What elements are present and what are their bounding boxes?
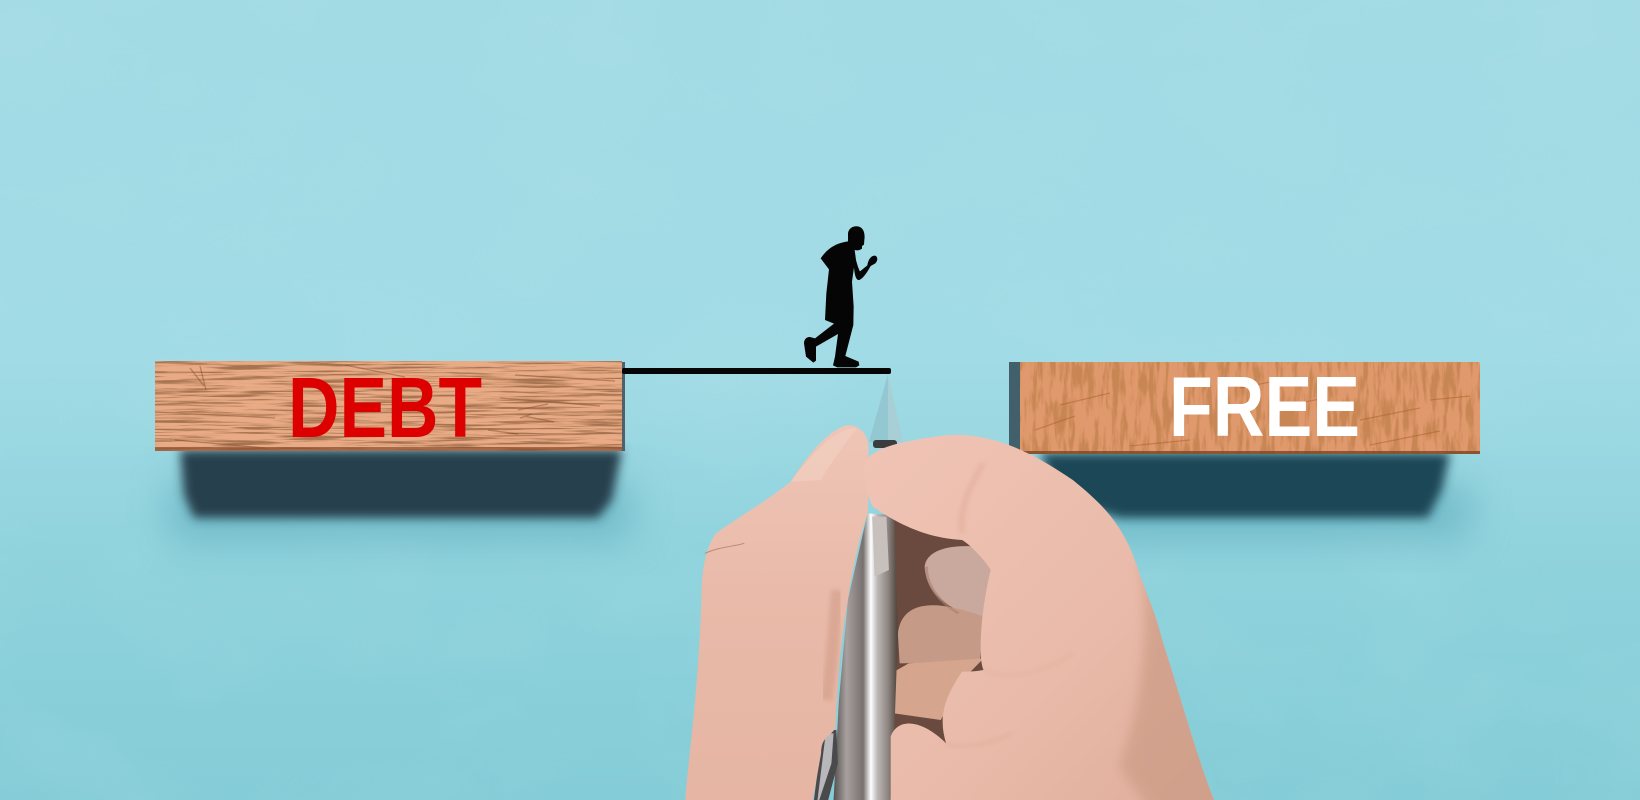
pen tip cone bbox=[869, 374, 903, 448]
shadow: debt block bbox=[170, 450, 630, 540]
curled fingers behind pen bbox=[891, 510, 1005, 757]
debt wooden block bbox=[155, 361, 625, 456]
thumb and palm bbox=[685, 425, 869, 800]
index finger and hand back bbox=[864, 435, 1237, 800]
label: DEBT: DEBT bbox=[288, 361, 482, 456]
drawn black line bridge bbox=[622, 368, 891, 374]
pen body bbox=[814, 513, 898, 800]
icon: running man silhouette bbox=[804, 226, 877, 367]
hand holding pen bbox=[685, 425, 1237, 800]
free wooden block bbox=[1009, 360, 1480, 455]
label: FREE: FREE bbox=[1169, 360, 1360, 455]
shadow: free block bbox=[1040, 453, 1470, 540]
